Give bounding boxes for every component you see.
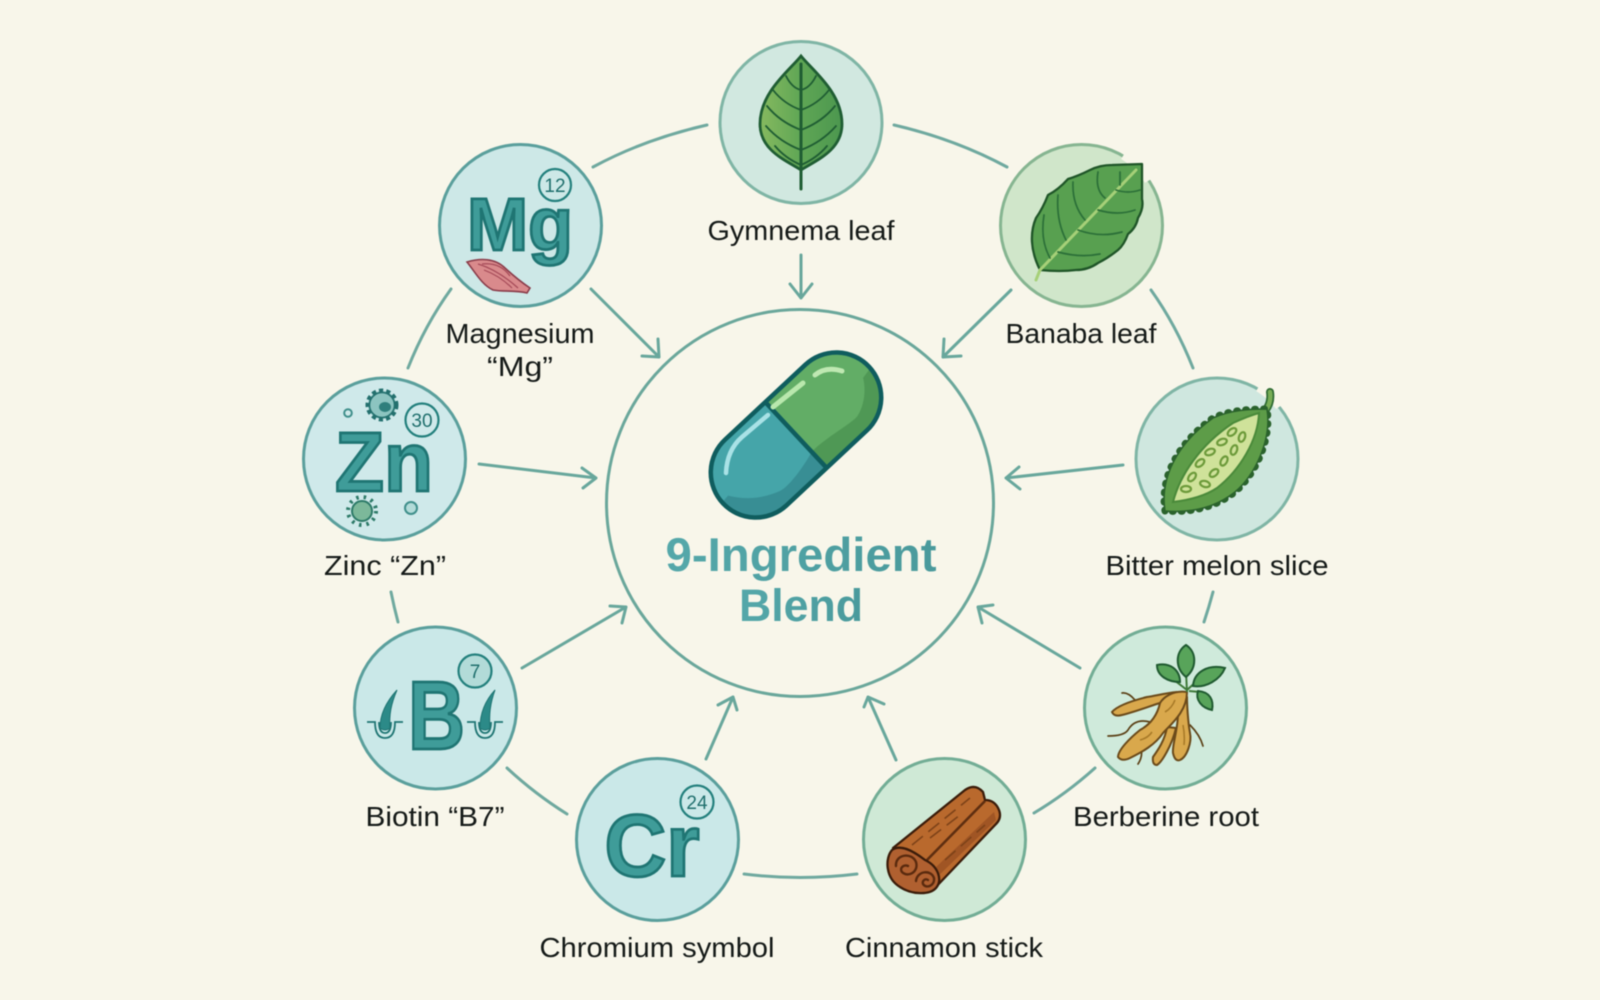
node: Zinc Zn — [304, 378, 466, 581]
node: Magnesium Mg — [440, 144, 602, 382]
title: 9-Ingredient Blend: Blend — [739, 580, 863, 631]
label: two lines: “Mg” — [487, 351, 553, 382]
element symbol: Zn: Zn — [335, 415, 433, 509]
label: Berberine root — [1073, 801, 1259, 832]
infographic: 9-ingredient blend diagram — [301, 39, 1328, 964]
node: Berberine root — [1073, 627, 1259, 832]
icon: bitter melon — [1164, 392, 1270, 511]
label: Banaba leaf — [1006, 318, 1157, 349]
element symbol: Mg: Mg — [467, 183, 573, 266]
icon: berberine root with leaves — [1108, 645, 1225, 765]
label: Biotin “B7” — [366, 801, 504, 832]
arrow: bitter melon to centre — [1006, 465, 1123, 489]
arrow: cinnamon to centre — [864, 697, 896, 760]
icon: banaba leaf — [1032, 164, 1142, 280]
title: 9-Ingredient Blend: 9-Ingredient — [666, 528, 937, 581]
connector arcs ring — [391, 125, 1213, 878]
icon: microbes and dots — [344, 391, 417, 525]
icon: gymnema leaf — [760, 56, 842, 189]
node: Biotin B7 — [354, 627, 516, 832]
node: Bitter melon slice — [1106, 378, 1328, 581]
label: Gymnema leaf — [708, 215, 895, 246]
badge: atomic number 12: 12 — [544, 176, 566, 197]
label: Cinnamon stick — [845, 932, 1044, 963]
element symbol: B: B — [408, 661, 465, 770]
icon: hair follicles — [367, 690, 503, 738]
badge: atomic number 24: 24 — [686, 793, 708, 814]
arrow: gymnema to centre — [790, 255, 812, 298]
badge: atomic number 30 — [406, 404, 438, 436]
badge: atomic number 12 — [539, 169, 571, 201]
node: Chromium symbol — [540, 758, 774, 963]
arrow: banaba to centre — [943, 290, 1011, 357]
badge: atomic number 30: 30 — [411, 411, 433, 432]
badge: number 7 — [458, 654, 492, 688]
label: Bitter melon slice — [1106, 550, 1328, 581]
central circle — [606, 310, 994, 696]
icon: capsule — [708, 349, 884, 521]
arrow: biotin to centre — [522, 606, 626, 668]
label: two lines: Magnesium — [446, 318, 594, 349]
label: Chromium symbol — [540, 932, 774, 963]
arrow: zinc to centre — [479, 464, 596, 488]
arrow: chromium to centre — [706, 697, 737, 759]
badge: atomic number 24 — [680, 786, 714, 818]
title: 9-Ingredient Blend — [666, 528, 937, 631]
node: Gymnema leaf — [708, 42, 895, 246]
icon: muscle — [467, 260, 530, 293]
element symbol: Cr: Cr — [604, 796, 700, 895]
label: two lines — [446, 318, 594, 382]
label: Zinc “Zn” — [324, 550, 446, 581]
icon: cinnamon stick — [887, 787, 1000, 893]
badge: number 7: 7 — [470, 662, 480, 683]
node: Cinnamon stick — [845, 758, 1044, 963]
node: Banaba leaf — [1000, 144, 1162, 349]
arrow: magnesium to centre — [591, 289, 659, 357]
arrow: berberine to centre — [978, 605, 1080, 668]
